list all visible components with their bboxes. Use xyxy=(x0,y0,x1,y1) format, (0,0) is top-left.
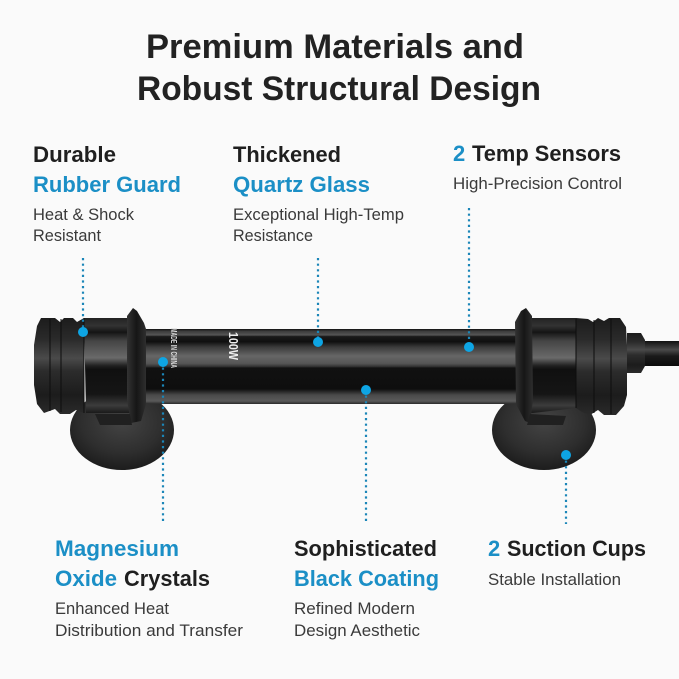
power cable xyxy=(640,341,679,366)
cable connector xyxy=(627,333,645,373)
callout: magnesium oxide crystals: Enhanced Heat xyxy=(55,600,169,618)
callout: suction cups: Stable Installation xyxy=(488,571,621,589)
title: Premium Materials and xyxy=(146,28,524,66)
callout: rubber guard xyxy=(33,142,181,337)
right rubber guard body xyxy=(530,318,576,413)
callout: rubber guard: Rubber Guard xyxy=(33,172,181,197)
callout: magnesium oxide crystals: Magnesium xyxy=(55,536,179,561)
callout: quartz glass: Quartz Glass xyxy=(233,172,370,197)
callout: magnesium oxide crystals: Distribution and Transfer xyxy=(55,622,244,640)
left suction cup xyxy=(70,390,174,470)
heater illustration xyxy=(34,308,679,470)
callout: suction cups xyxy=(488,450,646,589)
left rubber guard body xyxy=(84,318,130,413)
callout: magnesium oxide crystals: Crystals xyxy=(124,566,210,591)
left guard grooves xyxy=(50,318,84,413)
callout: suction cups: 2 xyxy=(488,536,500,561)
callout: black coating: Sophisticated xyxy=(294,536,437,561)
callout: temp sensors xyxy=(453,141,622,352)
left flange xyxy=(127,308,146,423)
callout: quartz glass xyxy=(233,142,404,347)
callout: rubber guard: Resistant xyxy=(33,227,101,245)
callout: quartz glass: Thickened xyxy=(233,142,341,167)
right guard ribs xyxy=(576,318,627,415)
callout: temp sensors: 2 xyxy=(453,141,465,166)
right guard grooves xyxy=(576,319,611,414)
callout: black coating: Black Coating xyxy=(294,566,439,591)
title xyxy=(137,28,541,108)
callout: magnesium oxide crystals xyxy=(55,357,244,640)
quartz tube xyxy=(140,329,520,404)
wattage print: 100W xyxy=(226,332,240,360)
callout: magnesium oxide crystals: Oxide xyxy=(55,566,117,591)
right clip tab xyxy=(527,414,566,425)
callout: black coating xyxy=(294,385,439,640)
callout: quartz glass: Exceptional High-Temp xyxy=(233,206,404,224)
callout: black coating: Refined Modern xyxy=(294,600,415,618)
callout: temp sensors: High-Precision Control xyxy=(453,175,622,193)
callout: quartz glass: Resistance xyxy=(233,227,313,245)
callout: rubber guard: Durable xyxy=(33,142,116,167)
origin print: MADE IN CHINA xyxy=(169,328,179,368)
title: Robust Structural Design xyxy=(137,70,541,108)
left clip tab xyxy=(95,414,132,425)
right suction cup xyxy=(492,390,596,470)
callout: black coating: Design Aesthetic xyxy=(294,622,420,640)
right flange xyxy=(515,308,533,423)
left guard ribs xyxy=(34,318,84,414)
callout: rubber guard: Heat & Shock xyxy=(33,206,135,224)
callout: suction cups: Suction Cups xyxy=(507,536,646,561)
callout: temp sensors: Temp Sensors xyxy=(472,141,621,166)
